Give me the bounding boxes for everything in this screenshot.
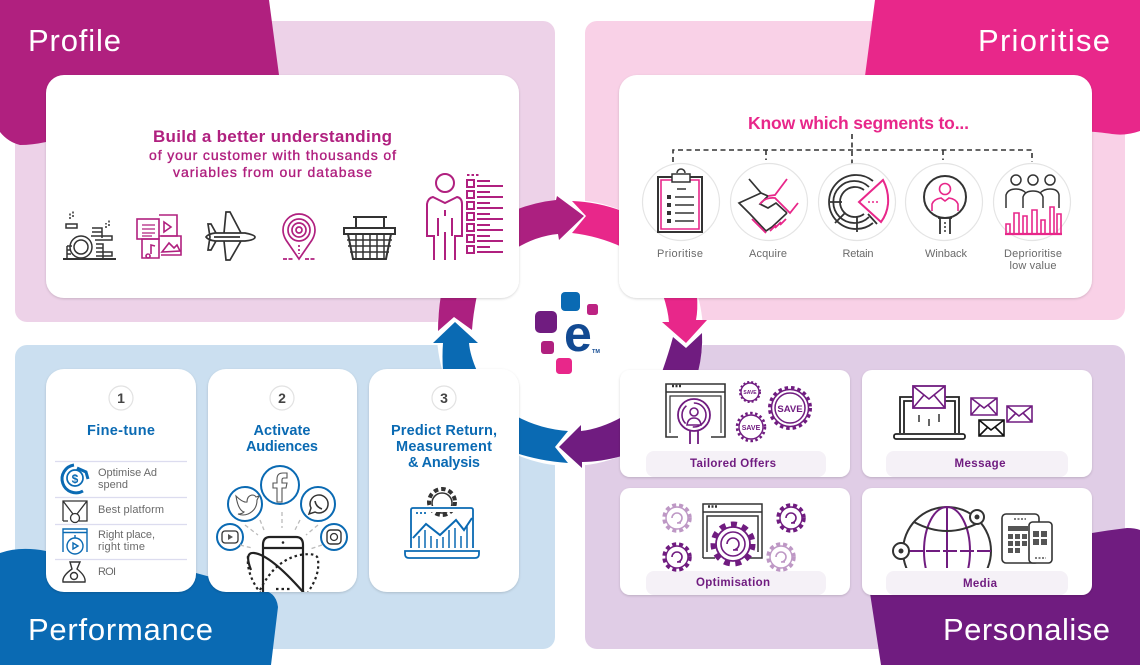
table rows xyxy=(55,462,187,582)
title: Profile: Profile xyxy=(28,23,121,58)
labels: segments: Winback xyxy=(925,248,968,260)
text: customer variables: variables from our database xyxy=(173,164,372,180)
cycle arrows xyxy=(433,196,707,468)
logo: experian xyxy=(535,292,600,374)
text: row labels: right time xyxy=(98,541,145,553)
heading: predict return: Predict Return, xyxy=(391,423,497,439)
label tab: tailored offers: Tailored Offers xyxy=(690,458,776,470)
logo: experian: TM xyxy=(592,349,600,355)
number badge 1: 1 xyxy=(117,390,125,406)
text: row labels: Best platform xyxy=(98,504,164,516)
arrow end: profile magenta xyxy=(438,295,477,331)
segment: acquire xyxy=(730,164,808,240)
title: Prioritise: Prioritise xyxy=(978,23,1110,58)
heading: activate audiences: Activate xyxy=(254,423,310,439)
icon: dollar cycle: $ xyxy=(72,472,79,486)
heading: activate audiences: Audiences xyxy=(246,439,318,455)
panel: profile card xyxy=(46,75,519,298)
panel: personalise background xyxy=(585,345,1125,649)
labels: segments: low value xyxy=(1010,260,1056,272)
labels: segments: Deprioritise xyxy=(1004,248,1062,260)
arrow end: prioritise pink xyxy=(572,201,622,247)
text: customer variables: of your customer with thousands of xyxy=(149,147,396,163)
number badge 3 xyxy=(432,386,456,410)
panel: profile background xyxy=(15,21,555,322)
text: row labels xyxy=(98,467,164,578)
heading: predict return xyxy=(391,423,497,471)
arrow: personalise to performance xyxy=(559,417,622,468)
label tab: media: Media xyxy=(963,578,998,590)
text: customer variables xyxy=(149,147,396,180)
segment: winback xyxy=(906,164,982,240)
text: row labels: spend xyxy=(98,479,128,491)
label tab: tailored offers xyxy=(646,451,826,477)
label tab: optimisation xyxy=(646,571,826,595)
text: row labels: Optimise Ad xyxy=(98,467,157,479)
label tab: message: Message xyxy=(954,458,1006,470)
performance corner blob xyxy=(0,549,278,665)
icons: save badges: SAVE xyxy=(742,425,761,432)
heading: know which segments: Know which segments to... xyxy=(748,113,969,133)
arrow end: performance blue xyxy=(516,416,568,463)
arrow: prioritise to personalise xyxy=(662,295,707,343)
icon: coins xyxy=(63,210,116,259)
text: row labels: Right place, xyxy=(98,529,155,541)
icon: laptop envelope xyxy=(894,386,965,439)
icon: window gear xyxy=(703,504,762,564)
panel: performance background xyxy=(15,345,555,649)
icon: medal envelope xyxy=(63,501,87,522)
arrow: profile to prioritise xyxy=(515,196,584,249)
icons: save badges: SAVE xyxy=(777,404,803,415)
icon: window with magnifier xyxy=(666,384,725,444)
profile corner blob xyxy=(0,0,281,145)
number badge 2: 2 xyxy=(278,390,286,406)
icon: basket xyxy=(344,217,395,259)
prioritise corner blob xyxy=(863,0,1140,135)
panel: prioritise card xyxy=(619,75,1092,298)
labels: segments: Retain xyxy=(842,248,874,260)
icon: plane xyxy=(206,212,255,260)
label tab: message xyxy=(886,451,1068,477)
heading: predict return: Measurement xyxy=(396,439,492,455)
icon: phone with orbits xyxy=(248,537,318,600)
icon: location target xyxy=(283,214,315,259)
connector: dashed tree xyxy=(673,134,1032,164)
icons: save badges: SAVE xyxy=(743,390,757,396)
logo: experian: e xyxy=(564,306,592,362)
icons: save badges xyxy=(737,382,810,441)
label tab: optimisation: Optimisation xyxy=(696,577,770,589)
panel: performance card 1 fine-tune xyxy=(46,369,196,592)
central white disc xyxy=(437,200,703,466)
number badge 3: 3 xyxy=(440,390,448,406)
icon: globe xyxy=(892,506,992,568)
icon: person data list xyxy=(427,174,503,260)
panel: tailored offers card xyxy=(620,370,850,477)
panel: performance card 2 activate audiences xyxy=(208,369,357,600)
label tab: media xyxy=(886,571,1068,595)
segment: prioritise xyxy=(642,164,720,240)
icon: laptop analytics xyxy=(405,489,479,558)
number badge 1 xyxy=(109,386,133,410)
segment: retain xyxy=(818,164,896,240)
icon: money bag xyxy=(63,562,85,582)
icons: envelopes xyxy=(971,398,1032,436)
labels: segments xyxy=(657,248,1062,272)
social icons xyxy=(217,466,347,550)
icon: stopwatch window xyxy=(63,529,87,554)
heading: fine-tune: Fine-tune xyxy=(87,423,155,439)
panel: optimisation card xyxy=(620,488,850,595)
panel: message card xyxy=(862,370,1092,477)
heading: build a better understanding: Build a better understanding xyxy=(153,127,392,146)
arrow end: personalise purple xyxy=(662,333,702,372)
icon: tablet and phone xyxy=(1002,514,1052,563)
text: row labels: ROI xyxy=(98,566,116,578)
title: Personalise: Personalise xyxy=(943,612,1110,647)
icon: media tiles xyxy=(137,215,181,258)
segment: deprioritise xyxy=(994,164,1070,240)
arrow: performance to profile xyxy=(433,322,478,371)
panel: prioritise background xyxy=(585,21,1125,320)
number badge 2 xyxy=(270,386,294,410)
panel: media card xyxy=(862,488,1092,595)
labels: segments: Prioritise xyxy=(657,248,703,260)
heading: predict return: & Analysis xyxy=(408,455,480,471)
heading: activate audiences xyxy=(246,423,318,455)
labels: segments: Acquire xyxy=(749,248,787,260)
panel: performance card 3 predict return xyxy=(369,369,519,592)
personalise corner blob xyxy=(868,528,1140,665)
title: Performance: Performance xyxy=(28,612,213,647)
icons: small gears xyxy=(664,505,804,570)
